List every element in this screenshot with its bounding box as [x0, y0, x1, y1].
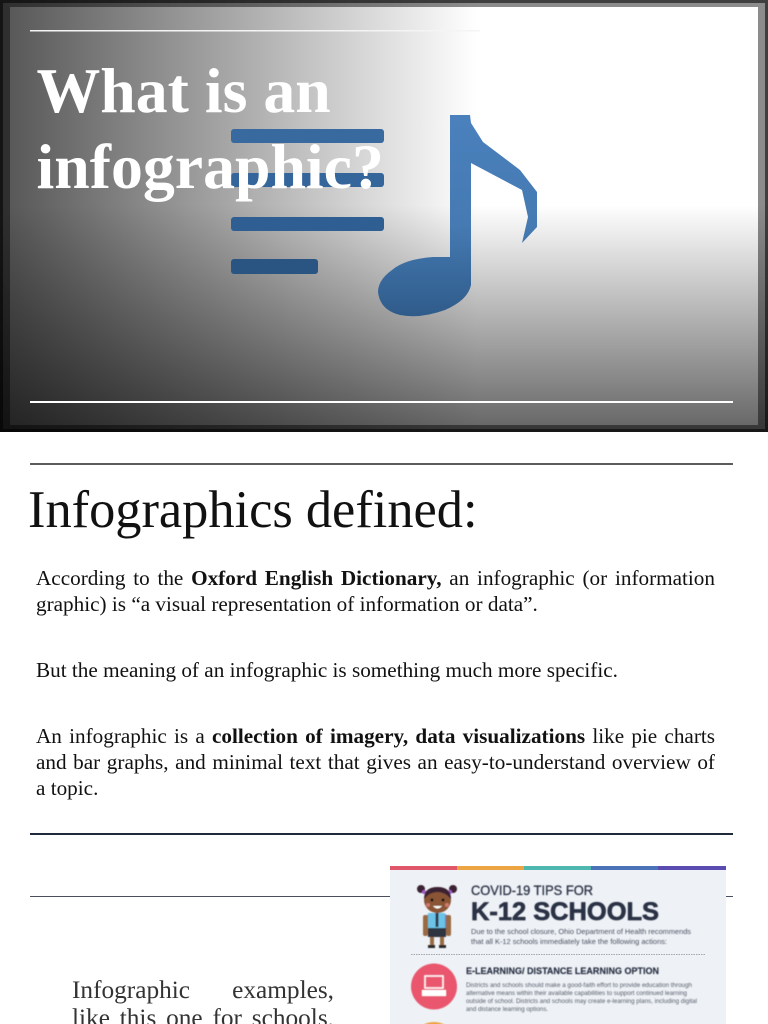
dashed divider: [411, 954, 706, 956]
definition text block: An infographic is a collection of imagery, data visualizations like pie charts: [36, 724, 715, 748]
section divider: [30, 833, 733, 835]
e-learning text: alternative means within their available capabilities to support continued learning: [466, 991, 687, 997]
definition text block: a topic.: [36, 776, 98, 800]
e-learning text: [466, 966, 697, 1013]
header text: that all K-12 schools immediately take the following actions:: [471, 937, 667, 946]
next badge: [411, 1022, 457, 1024]
colour strip: [390, 866, 726, 870]
example infographic: covid tips: [390, 866, 726, 1024]
example caption text: [72, 976, 334, 1024]
hero panel: [0, 0, 768, 432]
e-learning text: and distance learning options.: [466, 1007, 548, 1013]
e-learning text: outside of school. Districts and schools may create e-learning plans, including digital: [466, 999, 697, 1005]
title: [36, 55, 384, 202]
header text: [471, 882, 691, 946]
header text: Due to the school closure, Ohio Department of Health recommends: [471, 927, 691, 936]
title: infographic?: [36, 131, 384, 202]
section divider second: [30, 896, 733, 897]
definition text block: [36, 566, 715, 800]
top rule: [30, 30, 480, 32]
icon: schoolgirl: [417, 885, 457, 948]
definition text block: But the meaning of an infographic is something much more specific.: [36, 658, 618, 682]
heading: Infographics defined:: [28, 481, 478, 539]
definition divider top: [30, 463, 733, 465]
header text: COVID-19 TIPS FOR: [471, 882, 593, 898]
e-learning text: Districts and schools should make a good-faith effort to provide education through: [466, 983, 692, 989]
icon: lines of text: [231, 129, 384, 274]
icon: music note: [378, 115, 537, 316]
icon: laptop badge: [411, 964, 457, 1010]
hero background gradient: [0, 0, 768, 432]
header text: K-12 SCHOOLS: [471, 898, 659, 926]
definition text block: and bar graphs, and minimal text that gives an easy-to-understand overview of: [36, 750, 715, 774]
definition text block: According to the Oxford English Dictionary, an infographic (or information: [36, 566, 715, 590]
definition text block: graphic) is “a visual representation of information or data”.: [36, 592, 538, 616]
title: What is an: [36, 55, 331, 126]
bottom rule: [30, 401, 733, 403]
e-learning text: E-LEARNING/ DISTANCE LEARNING OPTION: [466, 966, 659, 977]
example caption text: Infographic examples,: [72, 976, 334, 1004]
